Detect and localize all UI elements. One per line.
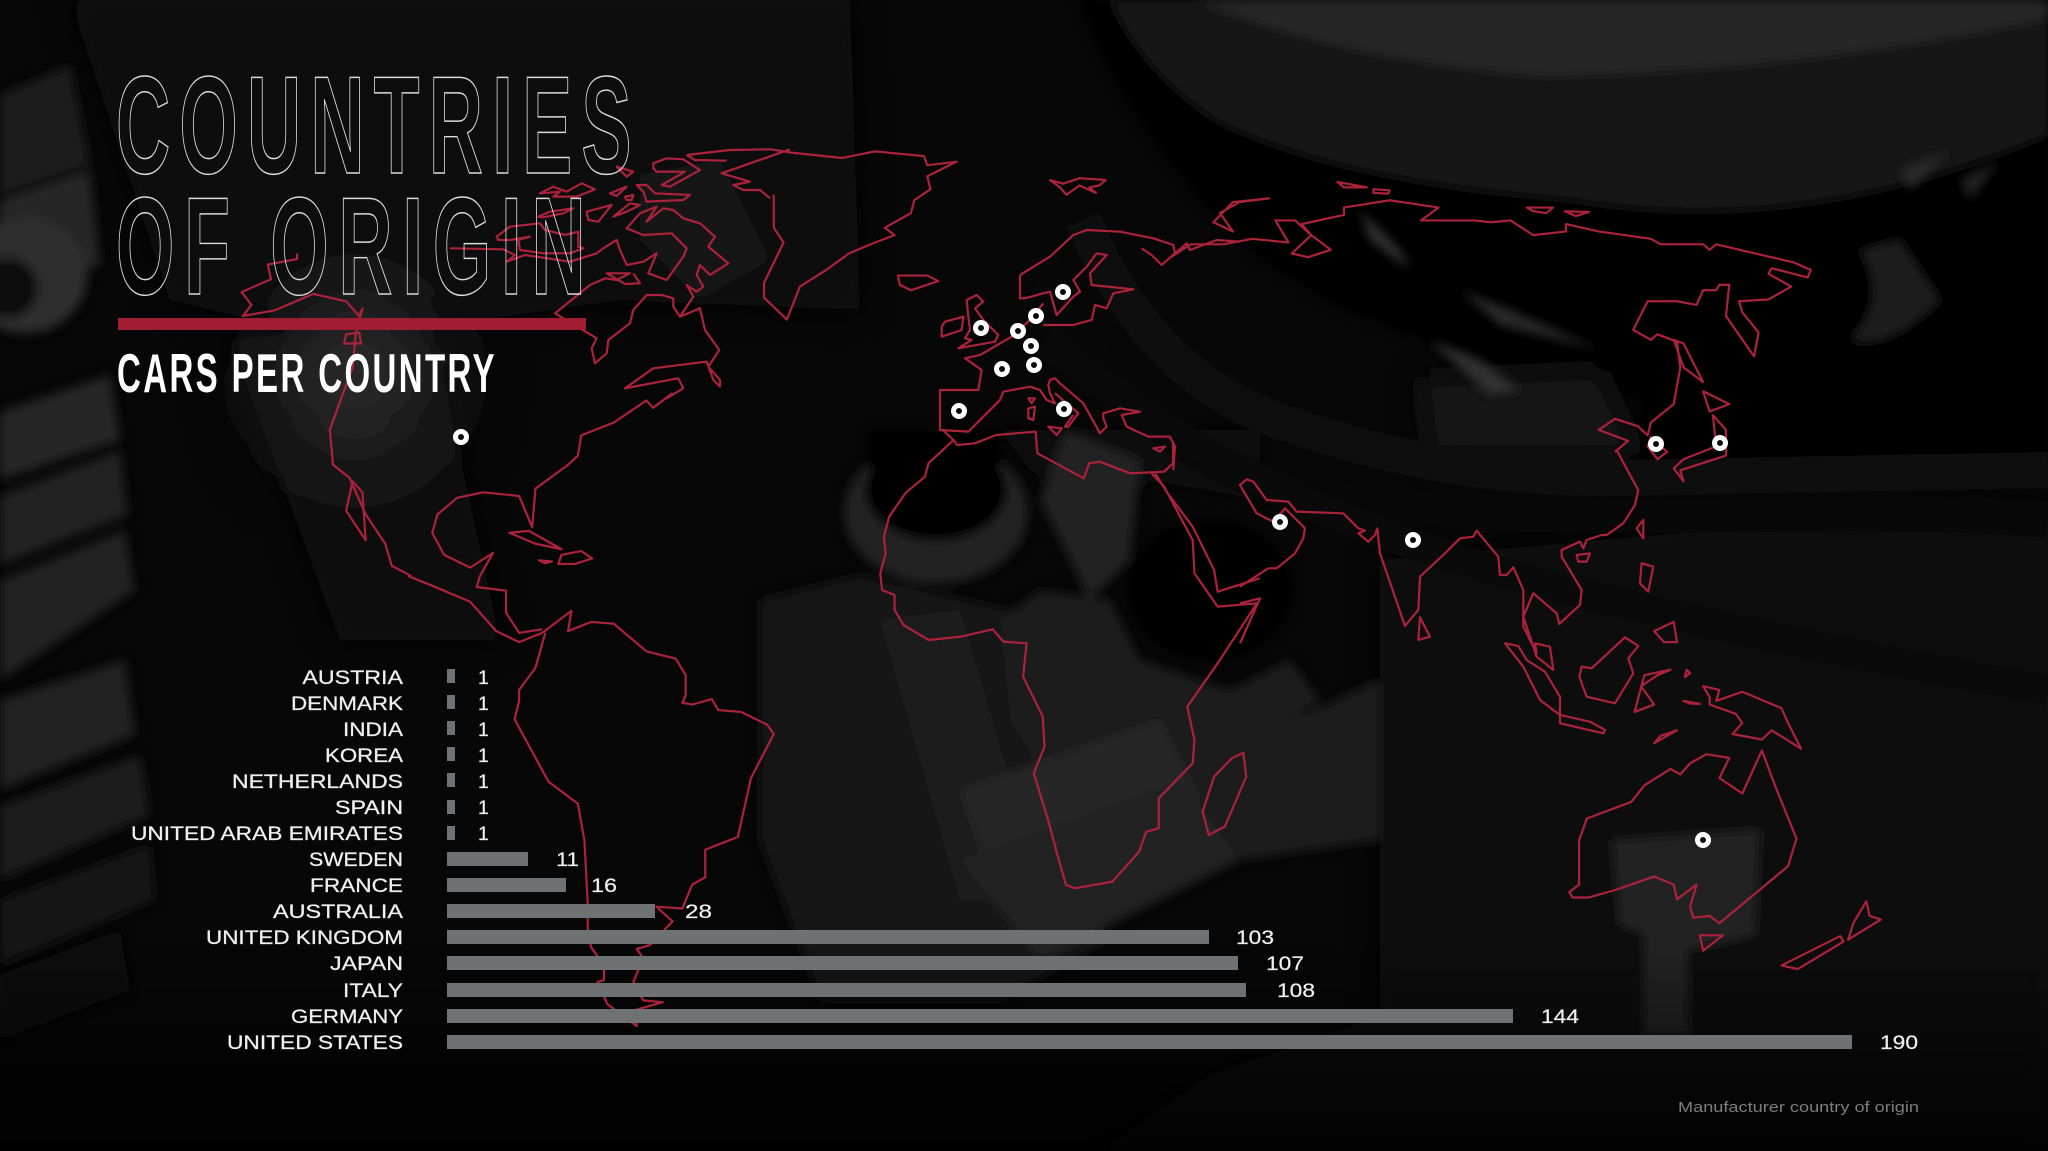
row: Netherlands: [232, 771, 489, 793]
row: Germany: [291, 1006, 1579, 1028]
row: Australia: 28: [685, 901, 712, 923]
world map outline: [242, 149, 1881, 1026]
row: Italy: ITALY: [343, 980, 403, 1002]
row: Sweden: [309, 849, 579, 871]
row: France: [310, 875, 617, 897]
dot: Korea: [1650, 438, 1662, 450]
row: United States: 190: [1880, 1032, 1918, 1054]
row: France: FRANCE: [310, 875, 403, 897]
row: Spain: 1: [478, 797, 489, 819]
row: Korea: 1: [478, 745, 489, 767]
dot: United States: [456, 432, 466, 442]
africa, arabia and madagascar: [880, 430, 1260, 888]
dot: Sweden: [1058, 286, 1068, 298]
row: Spain: [335, 797, 489, 819]
dot: Netherlands: [1012, 326, 1024, 336]
row: Sweden: 11: [556, 849, 579, 871]
row: Austria: AUSTRIA: [302, 667, 403, 689]
row: India: [343, 719, 489, 741]
dot: United Arab Emirates: [1274, 516, 1286, 528]
dot: Italy: [1058, 404, 1070, 414]
row: United Kingdom: [206, 927, 1274, 949]
footnote: Manufacturer country of origin: [1678, 1099, 1919, 1116]
europe and north africa coast: [940, 230, 1240, 470]
row: Sweden: SWEDEN: [309, 849, 403, 871]
row: France: 16: [591, 875, 617, 897]
row: India: INDIA: [343, 719, 403, 741]
dot: Spain: [954, 406, 964, 416]
row: Korea: KOREA: [325, 745, 403, 767]
row: Japan: JAPAN: [330, 953, 403, 975]
row: Austria: [302, 667, 489, 689]
row: Netherlands: 1: [478, 771, 489, 793]
row: United Arab Emirates: 1: [478, 823, 489, 845]
indonesia, australia and new zealand: [1569, 622, 1881, 969]
row: United States: [227, 1032, 1918, 1054]
dot: United Kingdom: [976, 322, 986, 334]
row: Denmark: [291, 693, 489, 715]
row: Denmark: DENMARK: [291, 693, 403, 715]
row: Denmark: 1: [478, 693, 489, 715]
row: Korea: [325, 745, 489, 767]
row: Australia: [273, 901, 712, 923]
row: United Arab Emirates: [131, 823, 489, 845]
row: Japan: 107: [1266, 953, 1304, 975]
red title rule: [118, 318, 586, 330]
row: United Kingdom: 103: [1236, 927, 1274, 949]
southern asia coast: [1240, 450, 1653, 733]
bar chart: cars per country: [131, 667, 1918, 1054]
dot: Australia: [1698, 834, 1708, 846]
row: United Arab Emirates: UNITED ARAB EMIRATES: [131, 823, 403, 845]
row: Italy: [343, 980, 1315, 1002]
title: [116, 47, 641, 324]
row: India: 1: [478, 719, 489, 741]
row: Netherlands: NETHERLANDS: [232, 771, 403, 793]
row: Australia: AUSTRALIA: [273, 901, 403, 923]
title: COUNTRIES: [116, 47, 641, 203]
dot: India: [1408, 534, 1418, 546]
dot: France: [996, 364, 1008, 374]
dot: Germany: [1026, 340, 1036, 352]
northern asia and japan: [1050, 178, 1811, 481]
row: Austria: 1: [478, 667, 489, 689]
row: United States: UNITED STATES: [227, 1032, 403, 1054]
row: Italy: 108: [1277, 980, 1315, 1002]
row: Germany: GERMANY: [291, 1006, 403, 1028]
north america arctic and canada: [450, 149, 790, 398]
dot: Austria: [1028, 360, 1040, 370]
row: Spain: SPAIN: [335, 797, 403, 819]
row: Germany: 144: [1541, 1006, 1579, 1028]
dot: Japan: [1714, 438, 1726, 448]
row: United Kingdom: UNITED KINGDOM: [206, 927, 403, 949]
subtitle: CARS PER COUNTRY: [117, 342, 497, 404]
row: Japan: [330, 953, 1304, 975]
country location dots: [456, 286, 1726, 846]
dot: Denmark: [1030, 310, 1042, 322]
americas and greenland: [242, 149, 957, 576]
south america: [408, 576, 774, 1026]
title: OF ORIGIN: [116, 168, 595, 324]
